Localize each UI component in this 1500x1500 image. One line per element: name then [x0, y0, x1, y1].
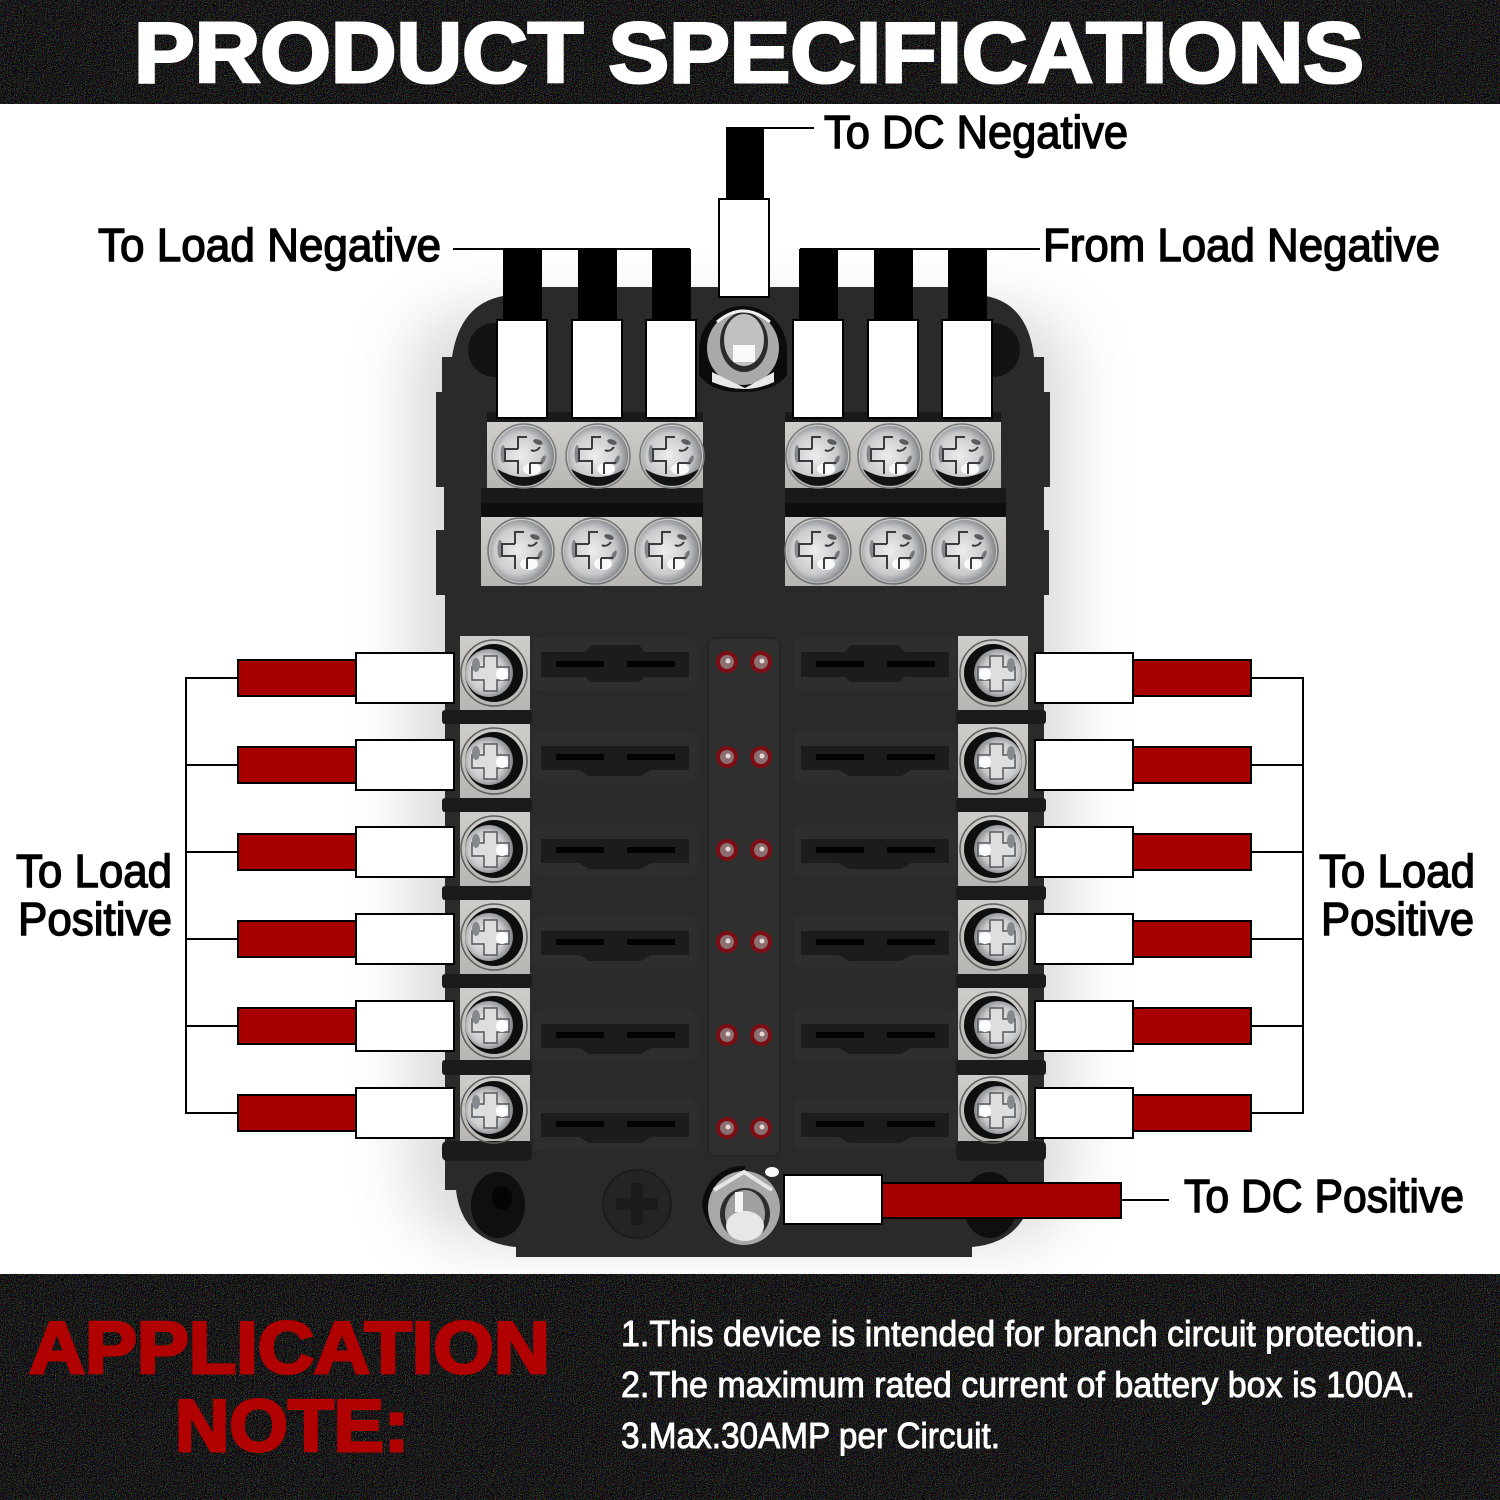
fuse column: left — [533, 638, 697, 1150]
fuse column: right — [793, 638, 957, 1150]
label: to load positive right: Positive — [1321, 893, 1474, 945]
label: to load negative: To Load Negative — [98, 219, 441, 271]
wires: from load negative — [793, 249, 1040, 418]
bus bar: upper right — [785, 422, 1001, 488]
wire: to DC positive — [784, 1175, 1169, 1224]
corner holes — [468, 323, 1020, 377]
busbar recess — [481, 412, 1006, 517]
left terminal plates — [442, 636, 532, 1161]
positive wires: right — [1035, 653, 1303, 1138]
label: to DC positive: To DC Positive — [1184, 1170, 1464, 1222]
application notes list: 3.Max.30AMP per Circuit. — [621, 1415, 1000, 1456]
bus bar: upper left — [487, 422, 704, 488]
wire: to DC negative — [719, 128, 814, 297]
positive post — [702, 1166, 780, 1245]
footer band — [0, 1274, 1500, 1500]
application note heading — [29, 1308, 550, 1467]
label: to load positive right — [1319, 845, 1475, 945]
bus bar: lower right — [785, 517, 1006, 586]
label: to load positive left: Positive — [18, 893, 172, 945]
application notes list: 1.This device is intended for branch circuit protection. — [621, 1313, 1424, 1354]
header band — [0, 0, 1500, 104]
right terminal plates — [956, 636, 1046, 1161]
application notes list — [621, 1313, 1424, 1456]
fuse block body — [436, 287, 1050, 1257]
label: from load negative: From Load Negative — [1043, 219, 1440, 271]
application note heading: APPLICATION — [29, 1308, 550, 1389]
label: to load positive left: To Load — [16, 845, 172, 897]
LED indicator strip — [708, 638, 780, 1156]
negative post — [699, 306, 787, 392]
bottom mount details — [471, 1170, 1017, 1238]
negative wires: top — [453, 128, 1040, 418]
title: PRODUCT SPECIFICATIONS — [134, 6, 1364, 101]
application note heading: NOTE: — [175, 1386, 409, 1467]
product shadow — [410, 310, 1070, 1240]
application notes list: 2.The maximum rated current of battery box is 100A. — [621, 1364, 1415, 1405]
recess shadow line — [481, 503, 1006, 517]
wires: to load negative — [453, 249, 696, 418]
label: to DC negative: To DC Negative — [824, 106, 1128, 158]
bus bar: lower left — [481, 517, 702, 586]
positive wires: left — [186, 653, 454, 1138]
label: to load positive right: To Load — [1319, 845, 1475, 897]
housing — [436, 287, 1050, 1257]
label: to load positive left — [16, 845, 172, 945]
